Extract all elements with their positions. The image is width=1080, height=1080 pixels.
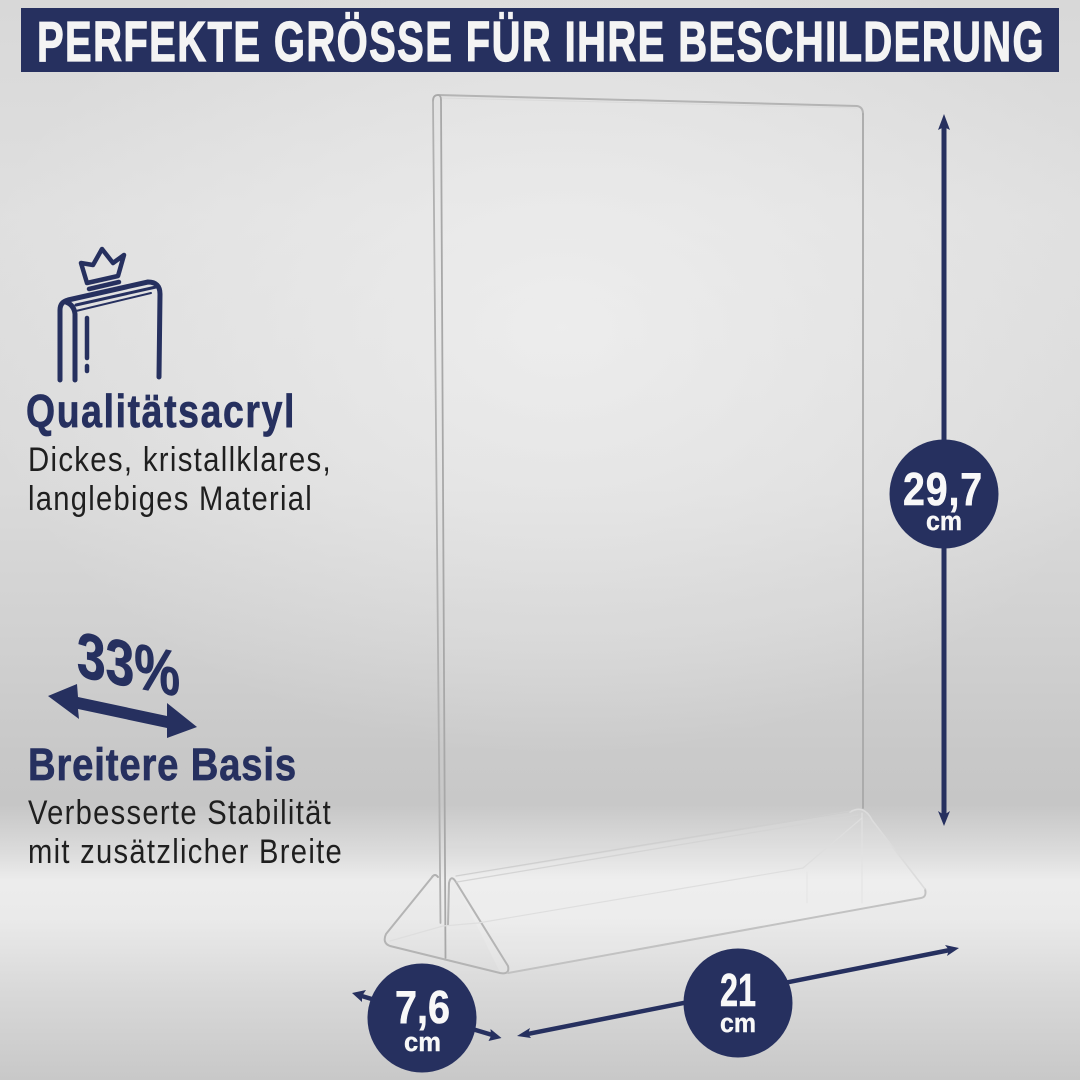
crown base line — [89, 282, 119, 289]
depth dimension arrow — [352, 990, 502, 1041]
book spine — [66, 302, 75, 380]
inner dot — [85, 366, 89, 371]
depth badge: 7,6 cm — [368, 964, 476, 1072]
height dimension arrow — [938, 114, 950, 826]
width badge: 21 cm: cm — [720, 1008, 756, 1038]
crown — [81, 249, 124, 283]
acrylic sign holder product — [385, 95, 926, 973]
triangular base — [385, 808, 926, 973]
text block: Breitere Basis — [28, 739, 343, 871]
icon: 33% wider arrow — [48, 618, 197, 738]
height badge: 29,7 cm: 29,7 — [903, 463, 983, 515]
inner mark — [85, 318, 89, 358]
text block: Qualitätsacryl: Dickes, kristallklares, — [28, 441, 332, 479]
height badge: 29,7 cm — [890, 440, 998, 548]
icon: book with crown — [60, 249, 160, 380]
height badge: 29,7 cm: cm — [926, 506, 962, 536]
book cover — [60, 282, 160, 380]
width dimension arrow — [517, 945, 959, 1038]
page lines — [76, 287, 156, 305]
depth badge: 7,6 cm: cm — [404, 1027, 441, 1057]
text block: Breitere Basis: mit zusätzlicher Breite — [28, 833, 343, 871]
width badge: 21 cm — [684, 948, 792, 1058]
text block: Breitere Basis: Breitere Basis — [28, 739, 297, 790]
text block: Qualitätsacryl: langlebiges Material — [28, 480, 313, 518]
depth badge: 7,6 cm: 7,6 — [395, 981, 450, 1033]
text block: Qualitätsacryl: Qualitätsacryl — [26, 385, 296, 437]
icon: 33% wider arrow: 33% — [77, 618, 180, 710]
width badge: 21 cm: 21 — [720, 964, 756, 1016]
text block: Breitere Basis: Verbesserte Stabilität — [28, 794, 332, 832]
lower page line — [76, 293, 151, 311]
text block: Qualitätsacryl — [26, 385, 332, 518]
clear panel — [433, 95, 863, 958]
